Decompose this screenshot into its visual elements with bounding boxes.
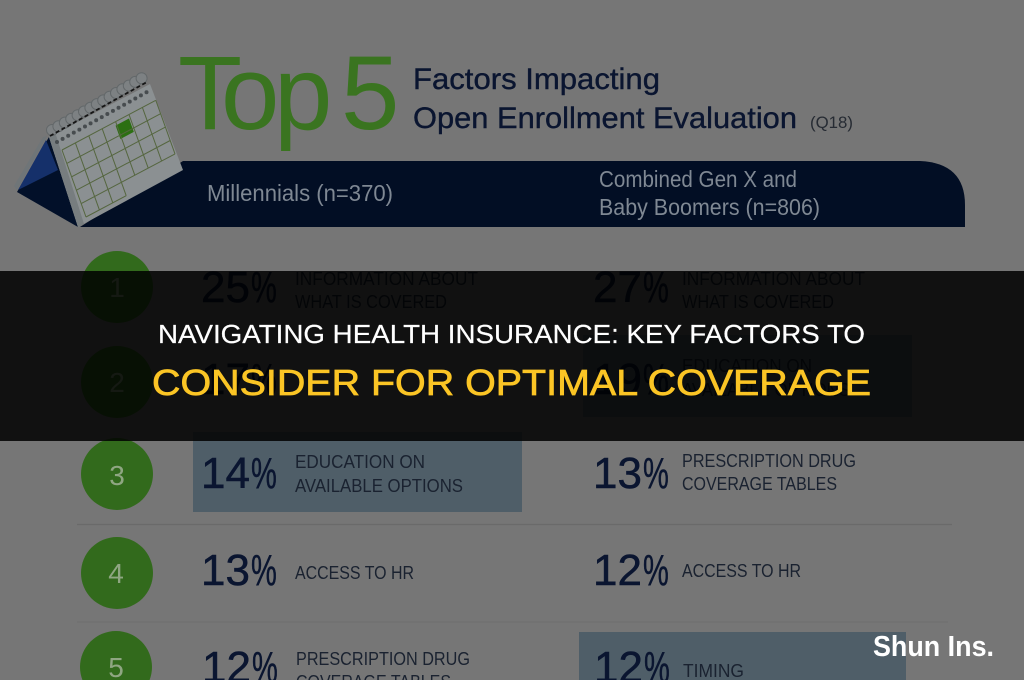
row 1: % (251, 262, 277, 311)
row 1 (81, 251, 865, 323)
row 3: % (643, 448, 669, 497)
headline line 1: NAVIGATING HEALTH INSURANCE: KEY FACTORS TO (158, 321, 865, 349)
ribbon label: gen x and boomers: Combined Gen X and (599, 166, 797, 192)
row 3: COVERAGE TABLES (682, 473, 837, 494)
row 2 (81, 335, 912, 418)
row 1: 27 (593, 263, 642, 312)
title: top 5: Top 5 (178, 35, 399, 152)
row 1: % (643, 262, 669, 311)
subtitle: Factors Impacting (413, 63, 660, 96)
subtitle: Open Enrollment Evaluation (413, 102, 797, 135)
row 1: INFORMATION ABOUT (682, 268, 865, 289)
ribbon label: gen x and boomers (599, 166, 820, 220)
row 2: % (643, 354, 669, 403)
row 5 (80, 631, 906, 680)
row 2: 17 (201, 355, 250, 404)
headline line 2: CONSIDER FOR OPTIMAL COVERAGE (152, 362, 871, 403)
row 4: % (251, 545, 277, 594)
row 3: 14 (201, 449, 250, 498)
row 4: 13 (201, 546, 250, 595)
row 2: % (251, 354, 277, 403)
row 4 (81, 537, 801, 609)
row 1: 1 (109, 272, 125, 303)
row 2: AVAILABLE OPTIONS (682, 379, 850, 400)
row 1: WHAT IS COVERED (295, 291, 447, 312)
row 1: 25 (201, 263, 250, 312)
question reference: (Q18) (810, 113, 853, 132)
title band (0, 271, 1024, 441)
row 2: 19 (593, 355, 642, 404)
ribbon label: millennials: Millennials (n=370) (207, 180, 393, 206)
row 3: PRESCRIPTION DRUG (682, 450, 856, 471)
row 3: % (251, 448, 277, 497)
row 5: PRESCRIPTION DRUG (296, 648, 470, 669)
row 2: 2 (109, 367, 125, 398)
row 3: EDUCATION ON (295, 451, 425, 472)
row 4: 4 (108, 558, 124, 589)
icon: desk calendar (14, 73, 183, 227)
row 1: INFORMATION ABOUT (295, 268, 478, 289)
row 1: WHAT IS COVERED (682, 291, 834, 312)
row 4: ACCESS TO HR (682, 560, 801, 581)
watermark: Shun Ins. (873, 631, 994, 663)
row 3: AVAILABLE OPTIONS (295, 475, 463, 496)
row 2: EDUCATION ON (682, 355, 812, 376)
ribbon label: gen x and boomers: Baby Boomers (n=806) (599, 194, 820, 220)
header ribbon (80, 161, 965, 227)
row 3: 3 (109, 460, 125, 491)
row 4: % (643, 545, 669, 594)
row 4: ACCESS TO HR (295, 562, 414, 583)
row 4: 12 (593, 546, 642, 595)
row 3: 13 (593, 449, 642, 498)
row 3 (81, 432, 856, 512)
subtitle (413, 63, 797, 135)
